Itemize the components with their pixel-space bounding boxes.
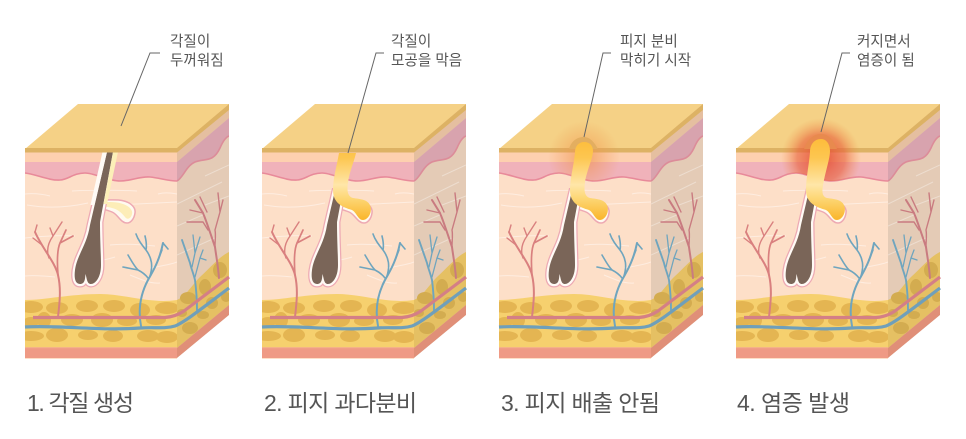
label 1: 각질이 bbox=[170, 33, 210, 50]
panel: stage 1 thickened keratin bbox=[18, 33, 231, 416]
label 2: 모공을 막음 bbox=[391, 52, 462, 69]
title 4: 4. 염증 발생 bbox=[737, 390, 850, 416]
label 2: 각질이 bbox=[391, 33, 431, 50]
label 4: 염증이 됨 bbox=[857, 52, 915, 69]
leader line 1 bbox=[121, 53, 160, 126]
panel: stage 3 sebum blocked bbox=[492, 33, 705, 416]
label 3: 피지 분비 bbox=[620, 33, 678, 50]
panel: stage 2 excess sebum bbox=[255, 33, 468, 416]
title 3: 3. 피지 배출 안됨 bbox=[501, 390, 660, 416]
skin block 3 bbox=[492, 104, 705, 364]
leader line 2 bbox=[348, 53, 384, 153]
skin block 4 bbox=[729, 104, 942, 364]
label 3: 막히기 시작 bbox=[620, 52, 691, 69]
leader line 3 bbox=[584, 53, 611, 137]
leader line 4 bbox=[821, 53, 850, 132]
label 1: 두꺼워짐 bbox=[170, 52, 224, 69]
panel: stage 4 inflammation bbox=[729, 33, 942, 416]
title 1: 1. 각질 생성 bbox=[27, 390, 134, 416]
skin block 2 bbox=[255, 104, 468, 364]
skin block 1 bbox=[18, 104, 231, 364]
label 4: 커지면서 bbox=[857, 33, 911, 50]
title 2: 2. 피지 과다분비 bbox=[264, 390, 417, 416]
